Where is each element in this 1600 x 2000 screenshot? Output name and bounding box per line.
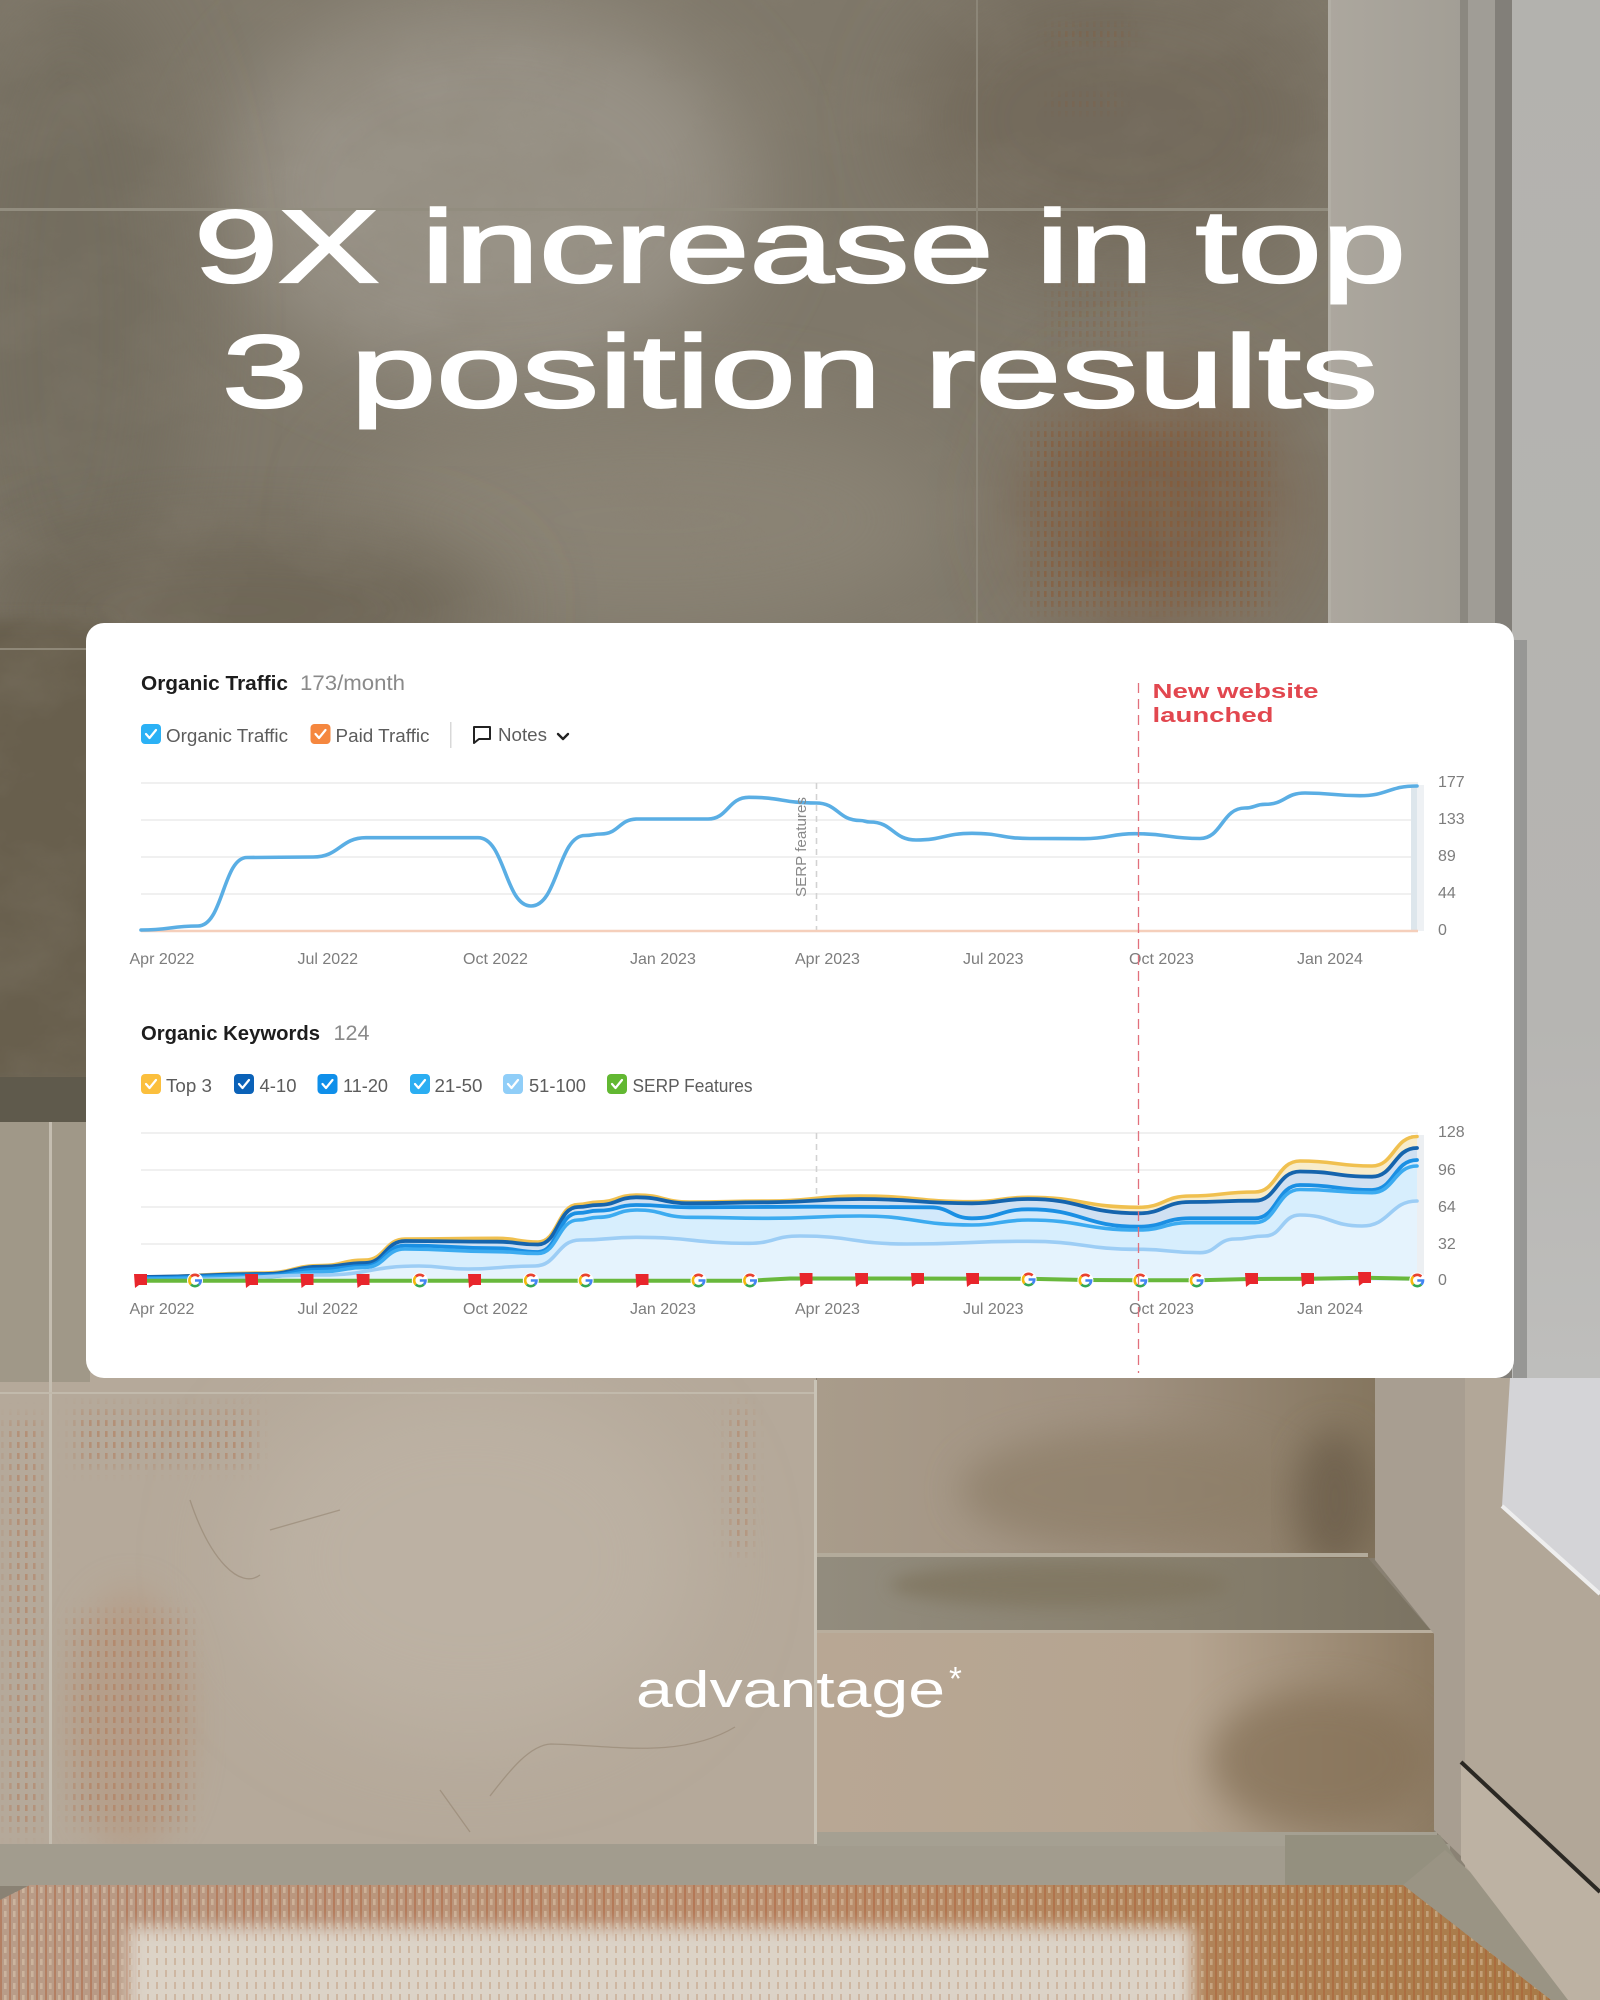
x axis: traffic: Apr 2023	[795, 951, 860, 968]
legend: traffic: Organic Traffic	[166, 726, 288, 746]
heading: organic traffic: Organic Traffic	[141, 672, 288, 695]
y axis: keywords: 64	[1438, 1199, 1456, 1216]
line chart: organic traffic	[141, 783, 1424, 931]
y axis: traffic	[1438, 774, 1465, 939]
x axis: keywords: Jan 2024	[1297, 1301, 1363, 1318]
y axis: traffic: 44	[1438, 885, 1456, 902]
logo: advantage: *	[949, 1660, 962, 1697]
heading: organic traffic: 173/month	[300, 672, 405, 695]
y axis: traffic: 0	[1438, 922, 1447, 939]
y axis: keywords: 128	[1438, 1124, 1465, 1141]
series line: SERP features	[141, 1278, 1417, 1281]
legend: keywords: 4-10	[260, 1076, 296, 1096]
x axis: keywords: Jan 2023	[630, 1301, 696, 1318]
y axis: traffic: 133	[1438, 811, 1465, 828]
floor	[0, 1844, 1450, 1886]
panel: analytics card	[86, 623, 1514, 1378]
series line: 11-20	[141, 1160, 1417, 1278]
x axis: keywords: Oct 2022	[463, 1301, 528, 1318]
chart section: organic keywords	[130, 1022, 1465, 1318]
x axis: traffic: Jul 2022	[298, 951, 358, 968]
x axis: keywords	[130, 1301, 1363, 1318]
title: 9X increase in top	[194, 189, 1406, 304]
x axis: traffic: Oct 2022	[463, 951, 528, 968]
y axis: keywords: 0	[1438, 1272, 1447, 1289]
x axis: traffic	[130, 951, 1363, 968]
x axis: traffic: Jan 2023	[630, 951, 696, 968]
title	[194, 189, 1406, 429]
logo: advantage: advantage	[636, 1661, 945, 1718]
series line: 4-10	[141, 1148, 1417, 1277]
legend: keywords	[141, 1074, 752, 1096]
x axis: traffic: Jan 2024	[1297, 951, 1363, 968]
x axis: keywords: Jul 2022	[298, 1301, 358, 1318]
x axis: keywords: Apr 2022	[130, 1301, 195, 1318]
wall tiles	[0, 0, 1330, 1090]
legend: keywords: SERP Features	[632, 1076, 752, 1096]
x axis: traffic: Apr 2022	[130, 951, 195, 968]
annotation text: SERP features: SERP features	[793, 797, 810, 897]
series line: 51-100	[191, 1201, 1417, 1280]
series line: top 3	[141, 1136, 1417, 1277]
x axis: keywords: Apr 2023	[795, 1301, 860, 1318]
callout: new website launched: New website	[1152, 681, 1318, 703]
series line: 21-50	[141, 1166, 1417, 1279]
legend: traffic: Paid Traffic	[336, 726, 430, 746]
y axis: keywords	[1438, 1124, 1465, 1289]
lower wall tile	[0, 1120, 816, 1845]
markers: red flags and Google icons	[134, 1272, 1425, 1288]
legend: keywords: Top 3	[166, 1076, 212, 1096]
callout: new website launched	[1152, 681, 1318, 727]
y axis: traffic: 177	[1438, 774, 1465, 791]
y axis: traffic: 89	[1438, 848, 1456, 865]
area chart: keyword positions	[134, 1133, 1425, 1288]
y axis: keywords: 32	[1438, 1236, 1456, 1253]
legend: traffic: Notes	[498, 725, 547, 745]
callout: new website launched: launched	[1152, 705, 1274, 727]
legend: traffic	[141, 722, 568, 748]
step	[817, 1378, 1375, 1558]
door frame	[1328, 0, 1465, 1400]
heading: organic keywords: 124	[334, 1022, 370, 1045]
rug	[0, 1885, 1551, 2000]
heading: organic keywords: Organic Keywords	[141, 1022, 320, 1045]
title: 3 position results	[222, 314, 1378, 429]
heading: organic traffic	[141, 672, 405, 695]
legend: keywords: 11-20	[343, 1076, 388, 1096]
chart section: organic traffic	[130, 672, 1465, 968]
legend: keywords: 51-100	[529, 1076, 586, 1096]
marker line: new website launch date	[1138, 683, 1140, 1373]
x axis: keywords: Oct 2023	[1129, 1301, 1194, 1318]
right wall and window	[1375, 1378, 1465, 1860]
x axis: traffic: Oct 2023	[1129, 951, 1194, 968]
area fills	[141, 1136, 1417, 1281]
baseboard	[1461, 1762, 1600, 2000]
y axis: keywords: 96	[1438, 1162, 1456, 1179]
x axis: keywords: Jul 2023	[963, 1301, 1024, 1318]
x axis: traffic: Jul 2023	[963, 951, 1024, 968]
legend: keywords: 21-50	[434, 1076, 482, 1096]
